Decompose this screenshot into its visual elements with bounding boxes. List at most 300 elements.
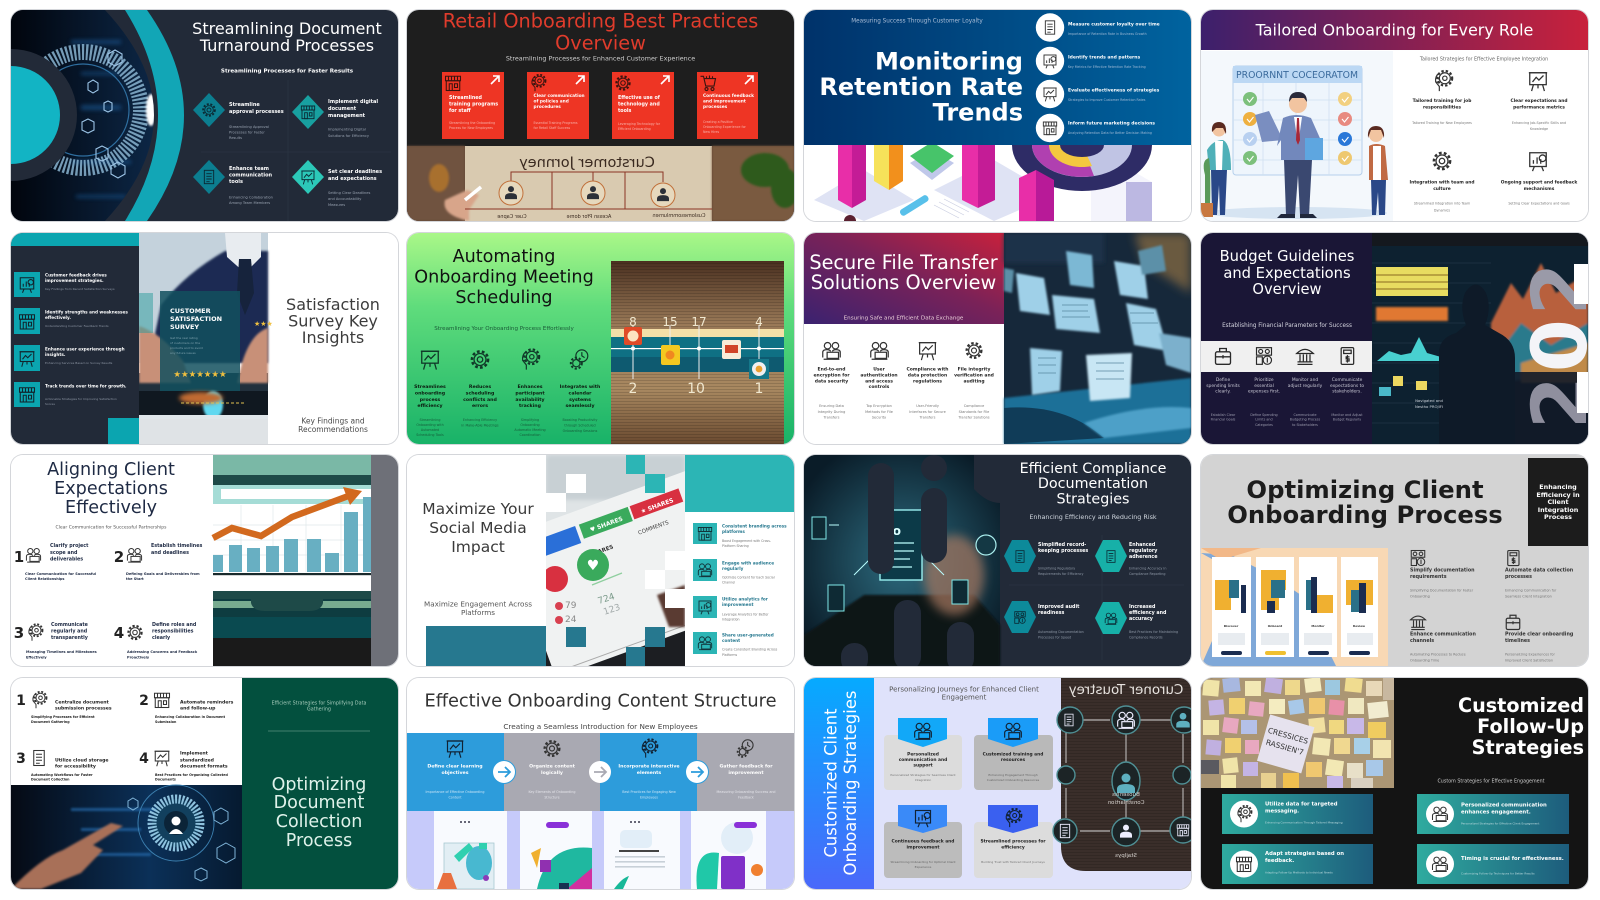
item: evaluate strategies: [1036, 80, 1160, 108]
title: Turnaround Processes: [198, 36, 374, 55]
item 2: Defining Goals and Deliverables from: [126, 572, 199, 576]
title: [1227, 475, 1503, 529]
subtitle: Personalizing Journeys for Enhanced Client: [889, 685, 1039, 693]
column: enhances: tracking: [519, 402, 541, 408]
header band: [804, 232, 1004, 324]
column: encryption: encryption for: [813, 372, 850, 378]
card: data messaging: [1222, 794, 1373, 834]
item: consistent branding: Platform Sharing: [722, 544, 749, 548]
item: automate collection: Seamless Client Integration: [1505, 594, 1552, 598]
column: encryption: data security: [815, 378, 848, 384]
item: digital document management: Solutions for Efficiency: [328, 134, 369, 138]
image: four onboarding screens: Monitor: [1311, 624, 1325, 628]
item 2: Establish timelines: [150, 543, 202, 549]
card: continuous feedback: Experience: [915, 864, 932, 868]
item: communication channels: Onboarding Time: [1410, 658, 1439, 662]
labels: supporting notes: Communicate: [1294, 412, 1316, 416]
item: ongoing support: Ongoing support and feedback: [1501, 180, 1577, 186]
card: training programs: Process for New Employees: [449, 126, 493, 130]
item 4: [113, 622, 197, 660]
item: ongoing support: [1501, 153, 1577, 206]
item 3: transparently: [50, 635, 88, 641]
item: automate collection: Automate data collection: [1505, 568, 1574, 574]
illustration strip: onboarding screens: [407, 810, 794, 888]
item: efficiency accuracy: Increased: [1129, 604, 1156, 610]
item: onboarding timelines: Personalizing Experiences for: [1505, 652, 1555, 656]
card: continuous feedback: and improvement: [703, 98, 746, 104]
item: track trends: Track trends over time for growth.: [44, 383, 126, 388]
item: training: Tailored training for job: [1413, 98, 1471, 104]
card: streamlined processes: efficiency: [1001, 844, 1025, 850]
card: personalized communication: Personalized communication: [1461, 802, 1547, 808]
column: authentication: Top Encryption: [865, 404, 892, 408]
title: Social Media: [429, 519, 527, 537]
card: personalized communication: Personalized Strategies for Seamless Client: [890, 772, 956, 776]
image: four onboarding screens: Review: [1353, 624, 1365, 628]
item: expectations: Enhancing Job-Specific Skills and: [1512, 121, 1566, 125]
item 3: Communicate: [50, 622, 88, 628]
item: regulatory adherence: regulatory: [1129, 548, 1158, 554]
item: team communication: Among Team Members: [228, 201, 270, 205]
callout: black tagline box: Client: [1547, 498, 1569, 506]
item: track trends: Scores: [44, 402, 55, 406]
subtitle: Creating a Seamless Introduction for New Employees: [503, 722, 698, 730]
item: efficiency accuracy: Compliance Records: [1129, 636, 1163, 640]
labels: supporting notes: Monitor and Adjust: [1331, 412, 1363, 416]
title: Onboarding Process: [1227, 500, 1503, 529]
title: [1458, 694, 1584, 758]
item: user experience: insights.: [44, 352, 65, 356]
title: [422, 500, 534, 556]
title: [1220, 248, 1354, 298]
step: gather feedback: Feedback: [738, 795, 754, 799]
column: authentication: Methods for File: [865, 410, 893, 414]
item: communication channels: [1410, 616, 1476, 662]
item 2: Enhancing Collaboration in Document: [154, 714, 225, 718]
image: timeline on wood: 1: [755, 380, 763, 396]
item: efficiency accuracy: accuracy: [1129, 616, 1154, 622]
item: inform marketing: Analyzing Retention Data for Better Decision Making: [1068, 131, 1152, 135]
item 4: Proactively: [126, 656, 149, 660]
item: identify trends: Identify trends and patterns: [1068, 55, 1140, 61]
item: audit readiness: Automating Documentation: [1038, 630, 1084, 634]
column: file integrity: File integrity: [958, 366, 990, 372]
item 2: [139, 692, 233, 724]
subtitle: Tailored Strategies for Effective Employee Integration: [1419, 56, 1548, 62]
photo: social media dashboard: 724: [597, 592, 616, 607]
item: ongoing support: mechanisms: [1524, 186, 1555, 192]
item: regulatory adherence: Compliance Reporting: [1129, 572, 1165, 576]
arrow 1: [492, 760, 516, 784]
labels: actions: spending limits: [1206, 382, 1240, 388]
subtitle: Clear Communication for Successful Partnerships: [55, 524, 167, 530]
item: training: [1411, 71, 1472, 125]
photo: social media dashboard: SHARES: [589, 544, 614, 558]
card: timing: Timing is crucial for effectiveness.: [1461, 855, 1564, 861]
title: Solutions Overview: [811, 270, 996, 294]
photo: businessman with survey tablet: CUSTOMER: [170, 306, 210, 314]
photo: businessman with survey tablet: products and to avoid: [170, 346, 202, 350]
side band: [804, 678, 874, 888]
step: define objectives: Importance of Effective Onboarding: [426, 790, 484, 794]
subtitle: Engagement: [942, 693, 987, 701]
card: streamlined processes: Streamlined processes for: [980, 838, 1046, 844]
photo: businessman with survey tablet: any future issues: [170, 350, 196, 354]
item 1: Centralize document: [54, 699, 109, 705]
card: clear communication: of policies and: [534, 98, 569, 104]
item: audit readiness: Improved audit: [1038, 604, 1080, 610]
item 1: 1: [13, 548, 24, 566]
photo: social media dashboard: COMMENTS: [638, 520, 670, 537]
item: deadlines: Measures: [328, 203, 345, 207]
callout: black tagline box: Enhancing: [1539, 483, 1577, 491]
item: training: responsibilities: [1423, 104, 1461, 110]
image: customer journey network: Curoner Toustrey: [1069, 682, 1183, 698]
item: simplify documentation: [1410, 550, 1475, 598]
item: expectations: Clear expectations and: [1510, 98, 1568, 104]
left panel: [10, 232, 138, 444]
labels: supporting notes: Define Spending: [1250, 412, 1278, 416]
item: inform marketing: Inform future marketing decisions: [1068, 121, 1155, 127]
photo: analyst facing dashboards: Navigated and: [1415, 398, 1443, 402]
item: team communication: Enhancing Collaboration: [228, 196, 272, 200]
subtitle: [298, 416, 367, 434]
panel: Efficient Compliance Documentation Strategies: [804, 455, 1191, 666]
item: track trends: [14, 382, 126, 406]
item: user content: Create Consistent Branding Across: [722, 648, 778, 652]
item: efficiency accuracy: Best Practices for Maintaining: [1129, 630, 1178, 634]
title: Document: [273, 792, 364, 812]
column: file integrity: Standards for File: [959, 410, 989, 414]
step: define objectives: [407, 732, 504, 810]
title: Expectations: [54, 479, 167, 499]
card: personalized communication: Personalized Strategies for Effective Client Engagement: [1461, 821, 1540, 825]
column: integrates: Boosting Productivity: [562, 418, 598, 422]
item: engage audience: regularly: [722, 566, 744, 571]
title: Satisfaction: [286, 294, 379, 314]
photo: businessman with survey tablet: [138, 232, 272, 444]
title: vertical: Onboarding Strategies: [841, 690, 860, 875]
item: integration: Dynamics: [1434, 208, 1450, 212]
card: continuous feedback: improvement: [906, 844, 940, 850]
subtitle: Enhancing Efficiency and Reducing Risk: [1029, 513, 1157, 521]
item: deadlines: and expectations: [328, 176, 376, 182]
image: customer journey network: [1053, 678, 1197, 870]
subtitle: Streamlining Your Onboarding Process Effortlessly: [434, 326, 574, 332]
image: four onboarding screens: [1201, 548, 1388, 666]
item 4: [139, 750, 228, 781]
item 1: Client Relationships: [24, 577, 64, 581]
column: streamlines: Streamlining: [420, 418, 440, 422]
item: track trends: Actionable Strategies for Improving Satisfaction: [44, 396, 116, 400]
card: personalized communication: support: [913, 762, 933, 768]
column: streamlines: Scheduling Tools: [416, 432, 444, 436]
column: enhances: [514, 349, 546, 436]
item: streamline approval: Results: [228, 136, 242, 140]
title: [47, 460, 175, 518]
column: integrates: calendar: [569, 390, 592, 396]
item 3: regularly and: [50, 628, 87, 634]
card: training programs: [442, 72, 504, 139]
photo: social media dashboard: ♥ SHARES: [589, 516, 624, 534]
labels: actions: Communicate: [1332, 376, 1363, 382]
card: technology: Leveraging Technology for: [618, 122, 661, 126]
item: efficiency accuracy: efficiency and: [1129, 610, 1167, 616]
subtitle: Streamlining Processes for Faster Results: [220, 68, 353, 74]
labels: supporting notes: [1211, 412, 1363, 426]
item: record keeping: Requirements for Efficiency: [1038, 572, 1083, 576]
column: file integrity: auditing: [963, 378, 985, 384]
ring: teal arc: [124, 10, 184, 221]
subtitle: Key Findings and: [301, 416, 364, 425]
item: evaluate strategies: Evaluate effectiveness of strategies: [1068, 88, 1160, 94]
column: integrates: seamlessly: [565, 402, 595, 408]
item: communication channels: Automating Processes to Reduce: [1410, 652, 1466, 656]
item: streamline approval: approval processes: [228, 109, 283, 115]
title: [271, 774, 366, 850]
card: training programs: for staff: [449, 108, 471, 114]
card: continuous feedback: [884, 804, 962, 878]
card: customized training: Enhancing Engagement Through: [988, 772, 1038, 776]
callout: black tagline box: Integration: [1538, 506, 1579, 514]
photo: social media dashboard: ★ SHARES: [640, 497, 675, 515]
item: analytics: Integration: [722, 618, 740, 622]
photo: businessman with survey tablet: SATISFACTION: [170, 314, 222, 322]
item 4: Best Practices for Organizing Collected: [154, 772, 228, 776]
card: personalized communication: Personalized: [907, 751, 939, 757]
item 2: and follow-up: [180, 705, 216, 711]
item: onboarding timelines: Improved Client Satisfaction: [1505, 658, 1553, 662]
item: integration: Streamlined Integration into Team: [1414, 202, 1470, 206]
step: interactive elements: Incorporate interactive: [618, 763, 680, 769]
column: integrates: [560, 349, 600, 432]
item: consistent branding: Consistent branding across: [722, 524, 787, 528]
item: integration: Integration with team and: [1409, 180, 1475, 186]
photo: social media dashboard: [546, 455, 685, 666]
column: authentication: User: [873, 366, 886, 372]
card: streamlined processes: [974, 804, 1053, 878]
item: strengths: [14, 308, 128, 334]
photo: wall of sticky notes: [1201, 676, 1394, 788]
card: adapt strategies: Adapting Follow-Up Methods to Individual Needs: [1265, 870, 1333, 874]
item: analytics: [693, 596, 769, 622]
title: Optimizing: [271, 774, 366, 794]
labels: supporting notes: Budgeting Process: [1290, 417, 1321, 421]
labels: actions: expectations to: [1330, 382, 1364, 388]
photo: digital interface in arc: [10, 10, 160, 221]
image: four onboarding screens: Discover: [1224, 624, 1239, 628]
step: interactive elements: [600, 732, 697, 810]
item 4: document formats: [180, 763, 227, 769]
item: record keeping: [1004, 540, 1088, 576]
step: organize content: Structure: [544, 795, 560, 799]
column: reduces: conflicts and: [463, 396, 497, 402]
item: engage audience: Engage with audience: [722, 560, 774, 566]
item: team communication: Enhance team: [228, 166, 268, 172]
title: [192, 19, 381, 55]
item: strengths: Identify strengths and weaknesses: [44, 309, 128, 314]
item: measure loyalty: [1036, 13, 1160, 42]
item: onboarding timelines: [1505, 615, 1574, 662]
photo: customer journey paper: Cuer Capne: [497, 214, 527, 220]
item 1: submission processes: [54, 705, 111, 711]
title: Overview: [1252, 280, 1322, 298]
item: efficiency accuracy: [1095, 602, 1178, 640]
accent: white pixel squares: [546, 474, 685, 608]
column: enhances: participant: [515, 390, 545, 396]
title: Retail Onboarding Best Practices: [443, 10, 758, 32]
card: technology: Effective use of: [618, 95, 661, 101]
item 4: 4: [139, 750, 149, 766]
item: digital document management: Implement digital: [328, 99, 378, 105]
item: communication channels: Enhance communication: [1410, 632, 1476, 638]
title: vertical: [822, 690, 860, 875]
photo: customer journey paper: [407, 146, 799, 221]
labels: supporting notes: Establish Clear: [1211, 412, 1236, 416]
title: [819, 48, 1023, 126]
step: interactive elements: Employees: [640, 795, 658, 799]
item: strengths: effectively.: [44, 314, 71, 320]
item: audit readiness: Processes for Speed: [1038, 636, 1071, 640]
title: Tailored Onboarding for Every Role: [1255, 20, 1533, 40]
item: audit readiness: [1004, 601, 1084, 640]
item: streamline approval: [192, 93, 283, 140]
callout: black tagline box: Efficiency in: [1536, 491, 1580, 499]
labels: supporting notes: Categories: [1255, 422, 1273, 426]
item: user content: content: [722, 638, 740, 643]
photo: social media dashboard: 79: [565, 601, 577, 611]
item 3: Automating Workflows for Faster: [30, 772, 92, 776]
photo: glowing compliance document: [804, 455, 1000, 666]
item: team communication: [192, 160, 272, 205]
photo: hand touching digital interface: [10, 784, 242, 888]
photo: analyst facing dashboards: [1372, 232, 1600, 444]
item: digital document management: [292, 95, 378, 138]
card: clear communication: for Retail Staff Success: [534, 126, 571, 130]
column: reduces: in Make-Able Meetings: [461, 423, 499, 427]
card: continuous feedback: processes: [703, 104, 728, 110]
subtitle: [424, 600, 532, 617]
column: streamlines: process: [420, 396, 440, 402]
column: compliance: Compliance with: [907, 366, 948, 372]
card: clear communication: Clear communication: [534, 93, 585, 99]
item: analytics: improvement: [722, 602, 754, 607]
column: reduces: Reduces: [469, 384, 491, 390]
column: compliance: Interfaces for Secure: [909, 410, 946, 414]
step: organize content: Organize content: [529, 763, 576, 769]
item 1: Clarify project: [50, 543, 89, 549]
card: personalized communication: enhances engagement.: [1461, 809, 1531, 815]
item 2: 2: [139, 692, 148, 708]
column: file integrity: [954, 343, 994, 419]
title: Maximize Your: [422, 500, 534, 518]
photo: customer journey paper: Curstomer Jornney: [519, 155, 655, 171]
item 4: Addressing Concerns and Feedback: [126, 650, 197, 654]
item 1: [16, 691, 111, 724]
item 2: Submission: [154, 720, 176, 724]
header band: [1201, 10, 1588, 50]
item: engage audience: Channel: [722, 580, 735, 584]
photo: businessman with survey tablet: ★★★: [254, 320, 272, 328]
column: streamlines: Automated: [421, 428, 439, 432]
column: authentication: and access: [865, 378, 893, 384]
item 1: deliverables: [50, 556, 83, 562]
item 4: Documents: [154, 777, 175, 781]
item: customer feedback: [14, 272, 114, 296]
right panel: [242, 678, 398, 888]
arrow 3: [685, 760, 709, 784]
column: reduces: Enhancing Efficiency: [463, 418, 497, 422]
title: vertical: Customized Client: [822, 707, 840, 857]
item: analytics: Utilize analytics for: [722, 596, 769, 602]
title: Optimizing Client: [1246, 475, 1484, 504]
title: Customized: [1458, 694, 1584, 716]
accent: top bar: [10, 232, 138, 246]
step: interactive elements: Best Practices for Engaging New: [622, 790, 676, 794]
column: authentication: authentication: [860, 372, 898, 378]
item: automate collection: Enhancing Communication for: [1505, 588, 1557, 592]
card: continuous feedback: Continuous feedback and: [892, 838, 954, 844]
subtitle: Streamlining Processes for Enhanced Customer Experience: [506, 54, 695, 62]
title: Collection: [275, 812, 362, 832]
title: Budget Guidelines: [1220, 248, 1354, 264]
title: Strategies: [1056, 492, 1130, 508]
item: regulatory adherence: Enhanced: [1129, 542, 1156, 548]
item: deadlines: Setting Clear Deadlines: [328, 191, 370, 195]
photo: wall of sticky notes: RASSIEN'7: [1265, 737, 1305, 757]
panel: Streamlining Document Turnaround Processes: [10, 10, 398, 221]
panel: Satisfaction Survey Key Insights: [10, 232, 398, 444]
item: consistent branding: [693, 523, 787, 548]
item: audit readiness: readiness: [1038, 610, 1064, 616]
item 2: Automate reminders: [180, 699, 233, 705]
item: user experience: [14, 344, 124, 370]
panel: Monitoring Retention Rate Trends: [804, 10, 1191, 221]
title: Overview: [555, 32, 646, 54]
title: Monitoring: [875, 48, 1023, 76]
subtitle: Recommendations: [298, 424, 367, 434]
card: customized training: resources: [1001, 756, 1026, 762]
card: clear communication: Essential Training Programs: [534, 121, 578, 125]
item: team communication: communication: [228, 172, 272, 178]
column: encryption: End-to-end: [818, 366, 845, 372]
column: integrates: through Scheduled: [564, 423, 596, 427]
title: and Expectations: [1223, 264, 1351, 282]
column: compliance: [907, 342, 948, 419]
title: [414, 246, 594, 308]
item: deadlines: Set clear deadlines: [328, 169, 382, 175]
card: clear communication: procedures: [534, 104, 561, 110]
item: strengths: Understanding Customer Feedback Trends: [44, 324, 109, 328]
column: compliance: User-Friendly: [916, 404, 939, 408]
column: enhances: Onboarding: [520, 422, 540, 426]
item 2: the Start: [126, 577, 144, 581]
item: engage audience: [693, 559, 775, 584]
column: authentication: controls: [869, 384, 890, 390]
labels: actions: essential: [1254, 382, 1274, 388]
item: digital document management: management: [328, 113, 365, 119]
image: timeline on wood: 8: [629, 314, 637, 328]
subtitle: Gathering: [307, 706, 330, 712]
card: training programs: Streamlining the Onboarding: [449, 121, 495, 125]
column: enhances: Automatic Meeting: [514, 428, 546, 432]
column: reduces: scheduling: [466, 390, 494, 396]
labels: supporting notes: to Stakeholders: [1292, 422, 1318, 426]
item: customer feedback: Key Findings from Recent Satisfaction Surveys: [44, 286, 114, 290]
item: team communication: tools: [228, 179, 242, 185]
card: personalized communication: [1417, 794, 1569, 834]
item: deadlines: and Accountability: [328, 197, 362, 201]
